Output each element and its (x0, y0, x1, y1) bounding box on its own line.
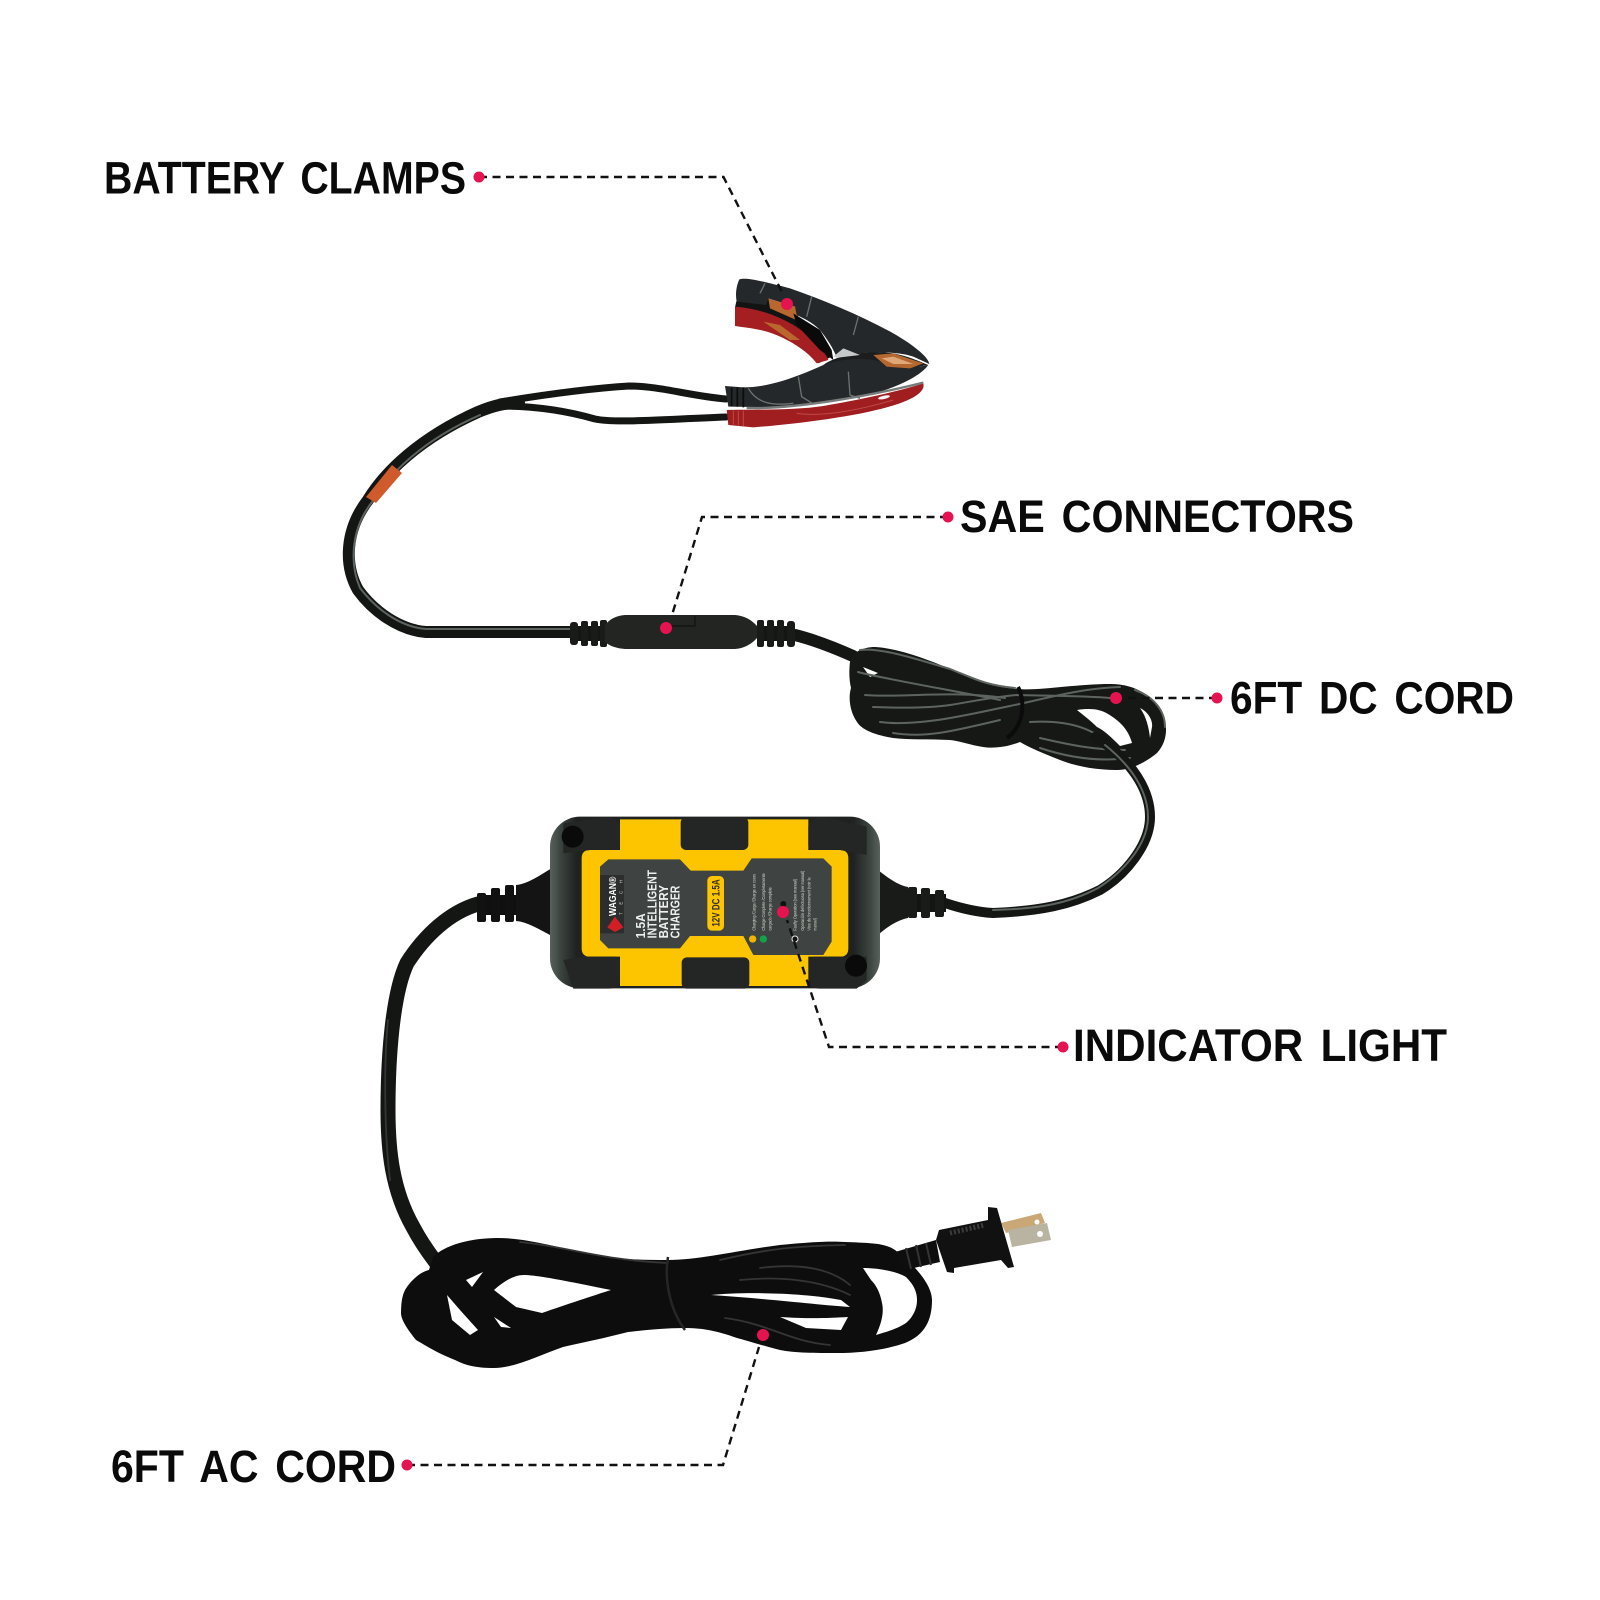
SAE connector (570, 615, 853, 656)
label: 6ft AC cord (111, 1329, 769, 1492)
logo block (600, 875, 624, 933)
grip lines (748, 283, 860, 404)
dark jaw interior (793, 313, 833, 360)
voltage badge (707, 876, 724, 931)
AC cord from charger down to coil (385, 868, 552, 1290)
indicator legend text: Faulty Operation (see manual) (793, 879, 799, 931)
pivot housing (823, 352, 928, 370)
indicator legend text: Charge Complete /Completamente (761, 873, 767, 931)
red jaw ribs (733, 400, 893, 426)
label: battery clamps (104, 152, 793, 310)
battery clamp leads cable (349, 386, 726, 632)
label: 6ft DC cord: 6FT DC CORD (1230, 672, 1514, 724)
indicator legend text: Operación defectuosa (ver manual) (800, 870, 806, 931)
brand sub text: T E C H (618, 880, 623, 915)
DC cord coil (849, 647, 1166, 770)
DC cord to charger (878, 737, 1150, 935)
dark backing between jaws (735, 298, 832, 363)
label: indicator light (777, 906, 1447, 1071)
indicator legend text: cargado /Charge complete (767, 887, 773, 931)
orange cable band (366, 465, 402, 503)
label: SAE connectors (660, 491, 1354, 634)
mounting holes (562, 826, 584, 848)
silver pivot (833, 348, 860, 357)
indicator legend text: Charging /Carga /Charge en cours (751, 874, 757, 931)
logo mark (607, 917, 623, 932)
copper inner contacts (763, 298, 800, 340)
voltage badge: 12V DC 1.5A (710, 879, 722, 927)
product name (634, 870, 683, 938)
product name: BATTERY (657, 884, 671, 938)
AC plug (895, 1207, 1051, 1273)
product name: 1.5A (634, 913, 648, 938)
label: indicator light: INDICATOR LIGHT (1073, 1020, 1447, 1071)
label: 6ft AC cord: 6FT AC CORD (111, 1441, 396, 1492)
copper tip (873, 353, 923, 368)
status lights (749, 901, 798, 943)
label: battery clamps: BATTERY CLAMPS (104, 152, 466, 204)
yellow housing (582, 819, 848, 986)
label: 6ft DC cord (1110, 672, 1514, 724)
lower black jaw (725, 359, 928, 407)
rubber pads (563, 817, 867, 989)
battery clamp (725, 279, 929, 427)
red lower jaw (727, 383, 924, 427)
charger body (550, 817, 880, 988)
indicator legend text: Vice de fonctionnement (voir le (807, 877, 813, 931)
product name: INTELLIGENT (646, 870, 660, 938)
AC cord coil (401, 1238, 932, 1368)
red upper jaw (735, 307, 828, 363)
product name: CHARGER (669, 886, 683, 938)
indicator legend text: manuel) (813, 918, 819, 931)
lower clamp sleeve ribs (732, 387, 743, 407)
upper black jaw (736, 279, 929, 364)
indicator legend text (751, 870, 819, 931)
brand name: WAGAN® (608, 876, 619, 916)
charger unit (550, 817, 880, 989)
label: SAE connectors: SAE CONNECTORS (960, 491, 1354, 542)
label panel (600, 858, 832, 955)
